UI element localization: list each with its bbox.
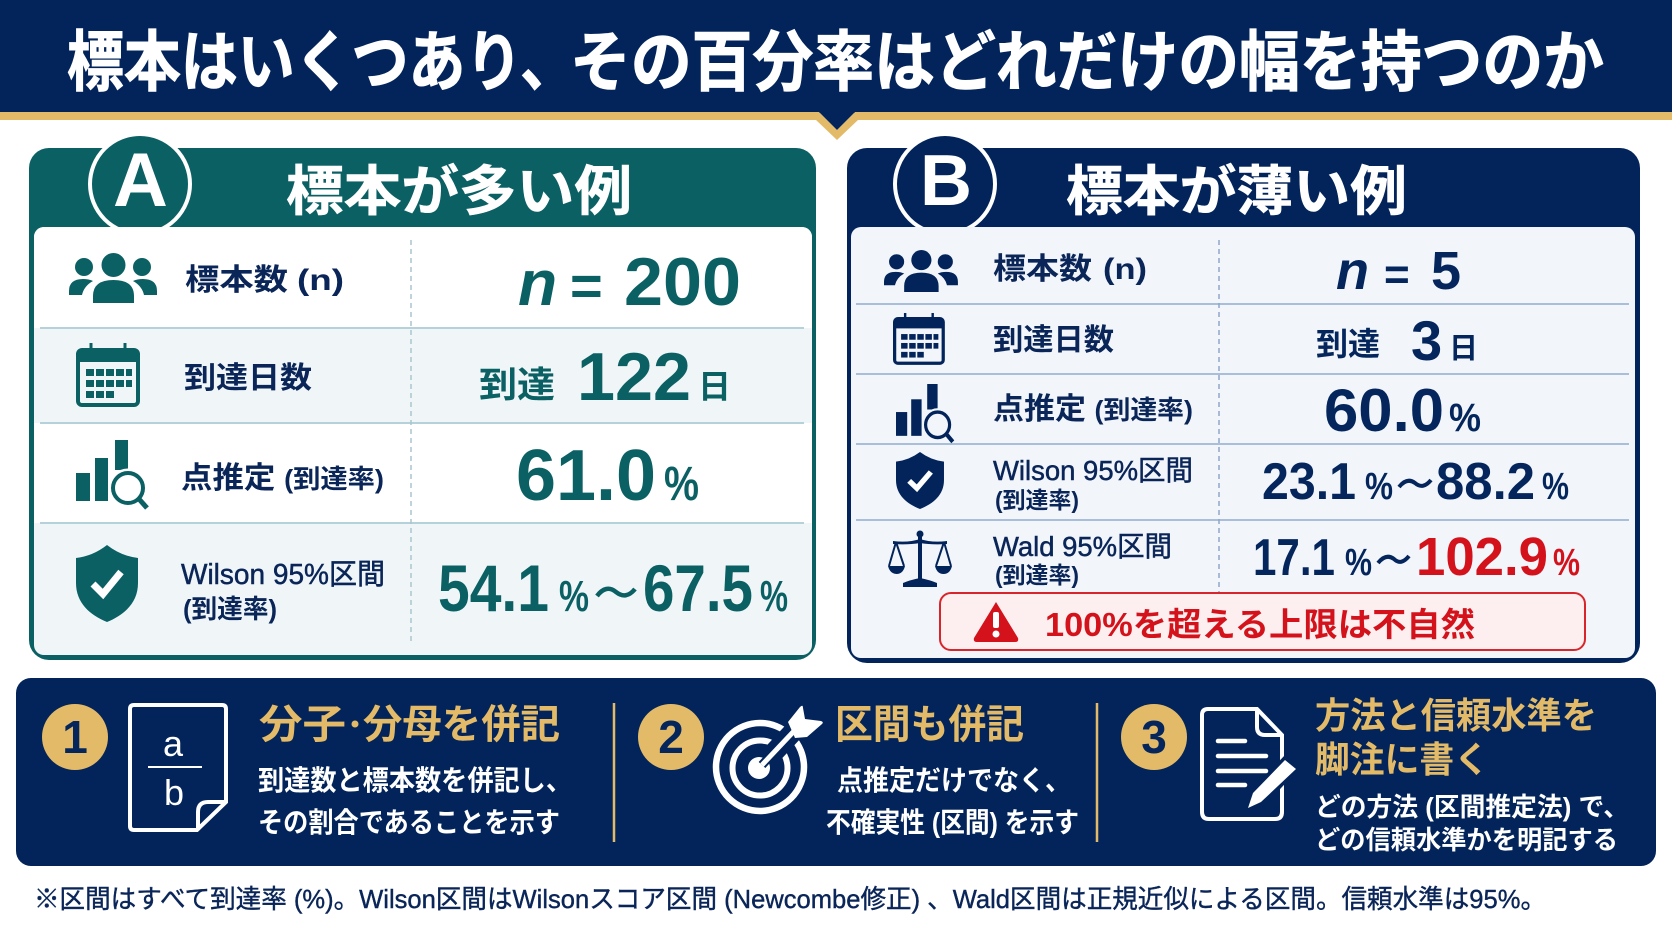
value: n=5: n — [1336, 241, 1369, 301]
label: days B: 到達日数 — [993, 324, 1114, 357]
step 3 heading — [1315, 695, 1597, 780]
value: 60.0%: 60.0 — [1324, 377, 1444, 444]
value: n=5: = — [1384, 250, 1410, 299]
title: その百分率はどれだけの幅を持つのか — [570, 25, 1604, 99]
step 1 body: 到達数と標本数を併記し、 — [258, 765, 572, 796]
step 1 body — [258, 765, 572, 838]
value: Wilson interval B: 23.1 — [1262, 453, 1356, 511]
panel: B — [847, 134, 1640, 663]
icon: chart B — [896, 384, 953, 442]
label: Wilson A: Wilson 95%区間 — [181, 559, 385, 591]
step 2 body: 不確実性 (区間) を示す — [826, 807, 1079, 838]
step 1 heading: 分母を併記 — [363, 703, 560, 747]
badge A: A — [113, 138, 168, 223]
value: Wilson interval B: 88.2 — [1436, 453, 1535, 511]
icon: warning triangle — [974, 602, 1018, 642]
panel: A — [29, 134, 816, 660]
icon: chart A — [76, 440, 147, 508]
step 3 heading: 脚注に書く — [1315, 739, 1489, 780]
value: 61.0%: % — [664, 458, 699, 511]
label: Wilson B: (到達率) — [995, 487, 1079, 513]
number badge 3: 3 — [1141, 711, 1167, 763]
badge A — [90, 134, 190, 234]
label: Wilson A — [181, 559, 385, 624]
step 2 body — [826, 765, 1079, 838]
value: n=200: n — [518, 247, 557, 319]
panel: recommendations — [16, 678, 1656, 866]
value: n=5: 5 — [1431, 241, 1461, 301]
step 3 body: どの方法 (区間推定法) で、 — [1315, 792, 1629, 822]
value: Wilson interval A — [438, 551, 788, 625]
heading B: 標本が薄い例 — [1066, 162, 1407, 222]
icon: calendar A — [78, 343, 138, 405]
icon: target — [716, 706, 823, 811]
step 1 body: その割合であることを示す — [258, 807, 560, 838]
icon: people B — [884, 250, 958, 292]
value: Wald interval: % — [1553, 542, 1580, 584]
label: Wilson B — [993, 455, 1193, 513]
label: point estimate B: 点推定 (到達率) — [993, 393, 1193, 426]
value: 122 days — [479, 339, 731, 415]
value: Wilson interval B: % — [1365, 466, 1393, 508]
value: Wilson interval A: 67.5 — [643, 551, 753, 625]
step 1 heading — [259, 703, 560, 747]
value: Wald interval: % — [1345, 542, 1372, 584]
step 1 heading: 分子 — [259, 703, 346, 747]
value: n=5 — [1336, 241, 1461, 301]
label: point estimate A: 点推定 (到達率) — [181, 462, 384, 495]
value: Wilson interval A: % — [559, 572, 589, 621]
value: Wilson interval B — [1262, 453, 1569, 511]
icon: people A — [69, 253, 157, 303]
panel B table background — [851, 227, 1635, 658]
value: Wald interval — [1253, 527, 1580, 587]
value: Wilson interval A: % — [760, 572, 788, 621]
callout text: 100%を超える上限は不自然 — [1045, 606, 1475, 643]
label: Wald — [993, 531, 1172, 588]
value: 3 days: 3 — [1411, 309, 1442, 372]
step 1 — [42, 703, 572, 838]
number badge 2 — [638, 704, 704, 770]
footnote: ※区間はすべて到達率 (%)。Wilson区間はWilsonスコア区間 (Newcombe修正) 、Wald区間は正規近似による区間。信頼水準は95%。 — [34, 884, 1546, 914]
value: 60.0%: % — [1449, 396, 1481, 440]
value: 3 days: 日 — [1449, 333, 1478, 365]
badge B: B — [920, 141, 972, 221]
panel B frame — [847, 148, 1640, 663]
icon: document with pen — [1202, 709, 1300, 819]
badge B — [895, 134, 995, 234]
number badge 3 — [1121, 704, 1187, 770]
number badge 1: 1 — [62, 711, 88, 763]
label: Wilson B: Wilson 95%区間 — [993, 455, 1193, 486]
icon: calendar B — [895, 313, 943, 363]
label: sample size B — [993, 253, 1147, 286]
value: 122 days: 到達 — [479, 364, 555, 405]
step 3 body — [1315, 792, 1629, 855]
label: sample size B: 標本数 — [993, 253, 1092, 286]
value: 3 days: 到達 — [1316, 326, 1380, 362]
title: 標本はいくつあり、 — [67, 25, 577, 99]
callout: warning — [940, 593, 1585, 650]
label: sample size A: (n) — [297, 264, 344, 297]
heading A: 標本が多い例 — [286, 162, 632, 222]
label: sample size A: 標本数 — [185, 264, 288, 297]
step 3 — [1121, 695, 1629, 855]
step 2 — [638, 703, 1079, 838]
step 3 heading: 方法と信頼水準を — [1315, 695, 1597, 736]
number badge 1 — [42, 704, 108, 770]
step 3 body: どの信頼水準かを明記する — [1315, 825, 1618, 855]
step 2 body: 点推定だけでなく、 — [837, 765, 1071, 796]
value: n=200 — [518, 244, 741, 320]
step 2 heading: 区間も併記 — [835, 703, 1024, 747]
icon: fraction document: b — [164, 772, 184, 813]
label: sample size A — [185, 264, 344, 297]
value: Wald interval: 102.9 — [1416, 527, 1548, 587]
value: n=200: 200 — [624, 244, 741, 320]
label: days A: 到達日数 — [184, 362, 312, 395]
label: sample size B: (n) — [1103, 253, 1147, 286]
label: Wald: Wald 95%区間 — [993, 531, 1172, 562]
value: Wilson interval B: % — [1542, 466, 1569, 508]
value: 122 days: 日 — [698, 368, 731, 405]
icon: shield A — [76, 545, 138, 622]
icon: fraction document — [130, 705, 226, 830]
value: 3 days — [1316, 309, 1478, 372]
label: Wilson A: (到達率) — [183, 594, 277, 624]
value: 61.0%: 61.0 — [516, 436, 656, 516]
value: 122 days: 122 — [577, 339, 691, 415]
number badge 2: 2 — [658, 711, 684, 763]
icon: scales — [888, 530, 952, 587]
label: Wald: (到達率) — [995, 562, 1079, 588]
icon: fraction document: a — [163, 723, 184, 764]
value: Wilson interval A: 54.1 — [438, 551, 549, 625]
value: Wald interval: 17.1 — [1253, 529, 1335, 587]
panel A table background — [34, 227, 812, 655]
header banner — [0, 0, 1672, 140]
title — [67, 25, 1604, 99]
icon: shield B — [896, 452, 944, 509]
panel A frame — [29, 148, 816, 660]
value: n=200: = — [570, 254, 603, 317]
